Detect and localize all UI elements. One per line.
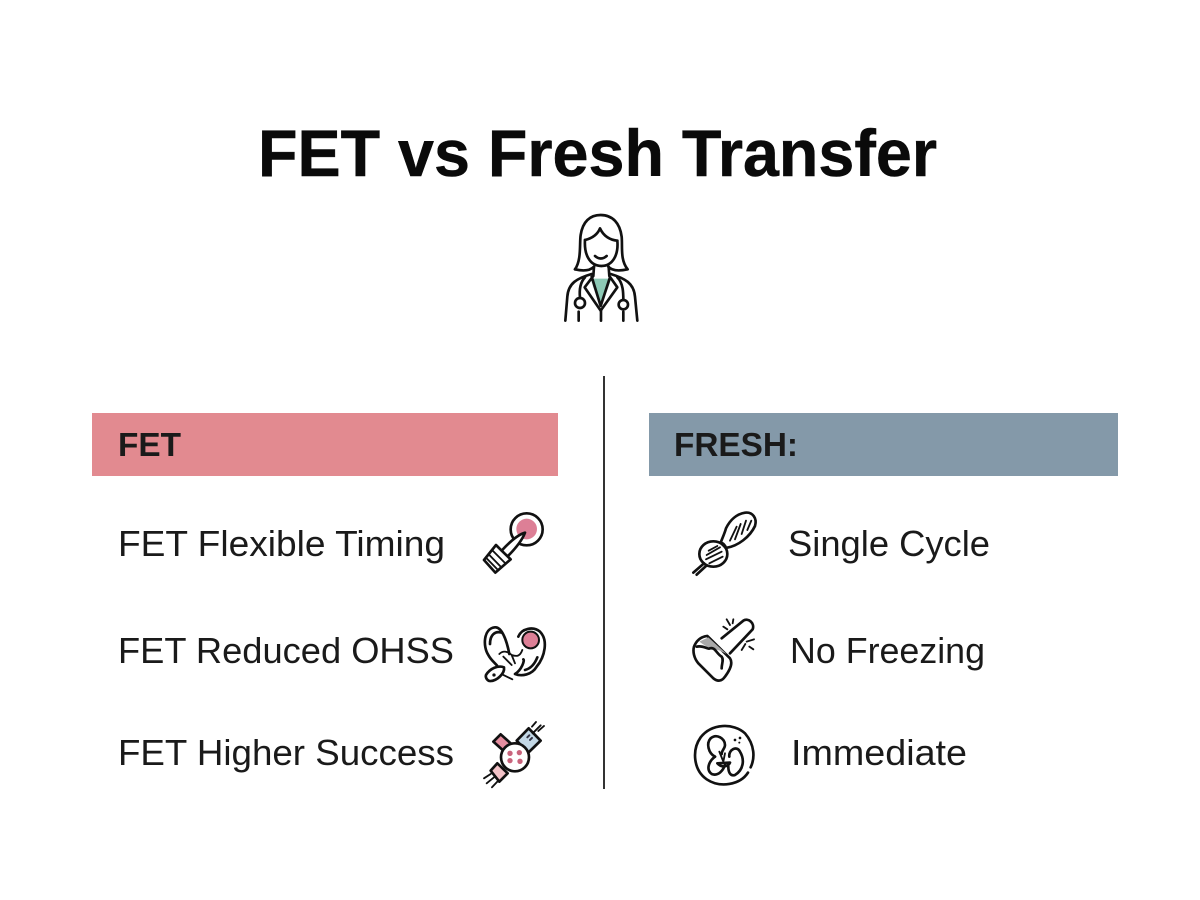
row: Single Cycle: Single Cycle bbox=[788, 523, 990, 564]
icon: doctor bbox=[565, 215, 637, 321]
row: Flexible Timing bbox=[118, 513, 543, 573]
panel: FET bbox=[92, 413, 558, 787]
icon: higher success bbox=[484, 722, 544, 787]
icon: flexible timing bbox=[484, 513, 543, 573]
header bar: FET bbox=[92, 413, 558, 476]
row: Immediate: Immediate bbox=[791, 732, 967, 773]
row: Reduced OHSS: FET Reduced OHSS bbox=[118, 630, 454, 671]
icon: reduced OHSS bbox=[485, 627, 545, 681]
row: Single Cycle bbox=[693, 513, 990, 575]
row: Flexible Timing: FET Flexible Timing bbox=[118, 523, 445, 564]
row: Higher Success bbox=[118, 722, 544, 787]
row: Higher Success: FET Higher Success bbox=[118, 732, 454, 773]
header bar: FET: FET bbox=[118, 426, 181, 463]
divider bbox=[603, 376, 605, 789]
row: Immediate bbox=[695, 726, 967, 784]
panel: FRESH bbox=[649, 413, 1118, 784]
title: FET vs Fresh Transfer bbox=[258, 116, 937, 190]
header bar: FRESH: FRESH: bbox=[674, 426, 798, 463]
icon: single cycle bbox=[693, 513, 756, 575]
row: No Freezing bbox=[694, 619, 985, 681]
icon: no freezing bbox=[694, 619, 754, 681]
header bar: FRESH bbox=[649, 413, 1118, 476]
row: Reduced OHSS bbox=[118, 627, 545, 681]
icon: immediate bbox=[695, 726, 753, 784]
row: No Freezing: No Freezing bbox=[790, 630, 985, 671]
